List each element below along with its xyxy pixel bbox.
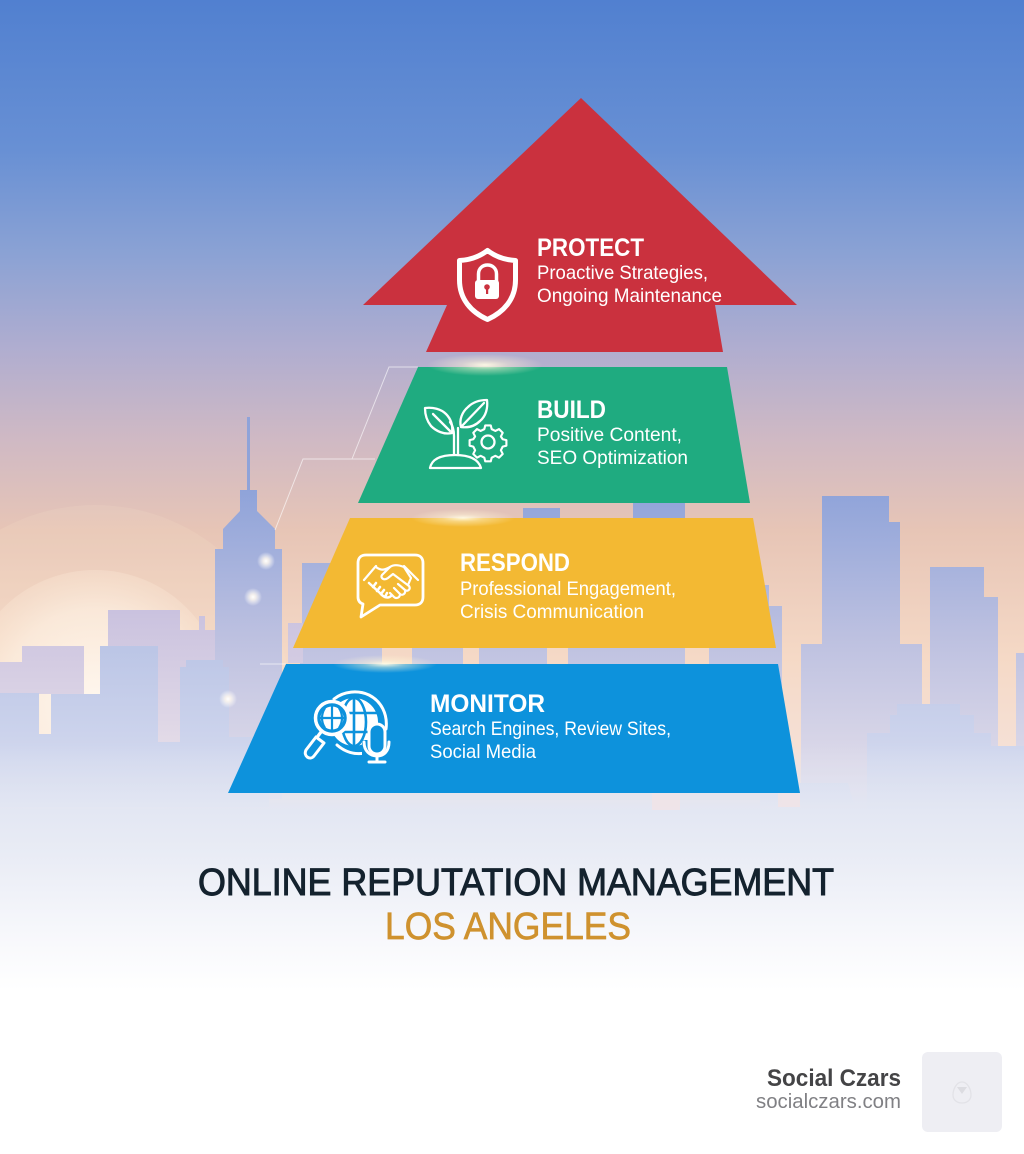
- monitor description: Social Media: [430, 741, 536, 763]
- pyramid tier: respond: [293, 518, 776, 648]
- sun: [0, 505, 290, 895]
- protect description: Proactive Strategies,: [537, 262, 708, 284]
- protect description: [537, 262, 722, 307]
- build heading: BUILD: [537, 396, 606, 424]
- build description: Positive Content,: [537, 424, 682, 446]
- protect arrow shape: [363, 98, 797, 352]
- monitor trapezoid: [228, 664, 800, 793]
- pyramid tier: protect: [363, 98, 797, 352]
- respond trapezoid: [293, 518, 776, 648]
- brand url: socialczars.com: [756, 1091, 901, 1113]
- brand name: Social Czars: [767, 1065, 901, 1092]
- respond description: Professional Engagement,: [460, 578, 676, 600]
- icon: handshake in speech bubble: [358, 555, 423, 617]
- pyramid tier: build: [358, 367, 750, 503]
- respond heading: RESPOND: [460, 549, 570, 577]
- monitor description: Search Engines, Review Sites,: [430, 718, 671, 740]
- build description: [537, 424, 688, 469]
- title: ONLINE REPUTATION MANAGEMENT: [198, 862, 834, 904]
- icon: logo placeholder bear: [953, 1082, 971, 1103]
- title: [198, 862, 834, 948]
- build description: SEO Optimization: [537, 447, 688, 469]
- glow highlights: [333, 354, 543, 673]
- light sparkles: [219, 552, 275, 708]
- respond description: Crisis Communication: [460, 601, 644, 623]
- bottom fade to white: [0, 745, 1024, 990]
- logo tile: [922, 1052, 1002, 1132]
- monitor description: [430, 718, 671, 763]
- icon: shield with padlock: [460, 250, 516, 320]
- icon: magnifier, globe and microphone: [305, 692, 392, 765]
- protect description: Ongoing Maintenance: [537, 285, 722, 307]
- footer brand: [756, 1052, 1002, 1132]
- monitor heading: MONITOR: [430, 690, 545, 718]
- subtitle: city: LOS ANGELES: [385, 906, 631, 948]
- city skyline: [0, 417, 1024, 810]
- icon: plant and gear: [425, 400, 506, 468]
- respond description: [460, 578, 676, 623]
- protect heading: PROTECT: [537, 234, 644, 262]
- pyramid tier: monitor: [228, 664, 800, 793]
- build trapezoid: [358, 367, 750, 503]
